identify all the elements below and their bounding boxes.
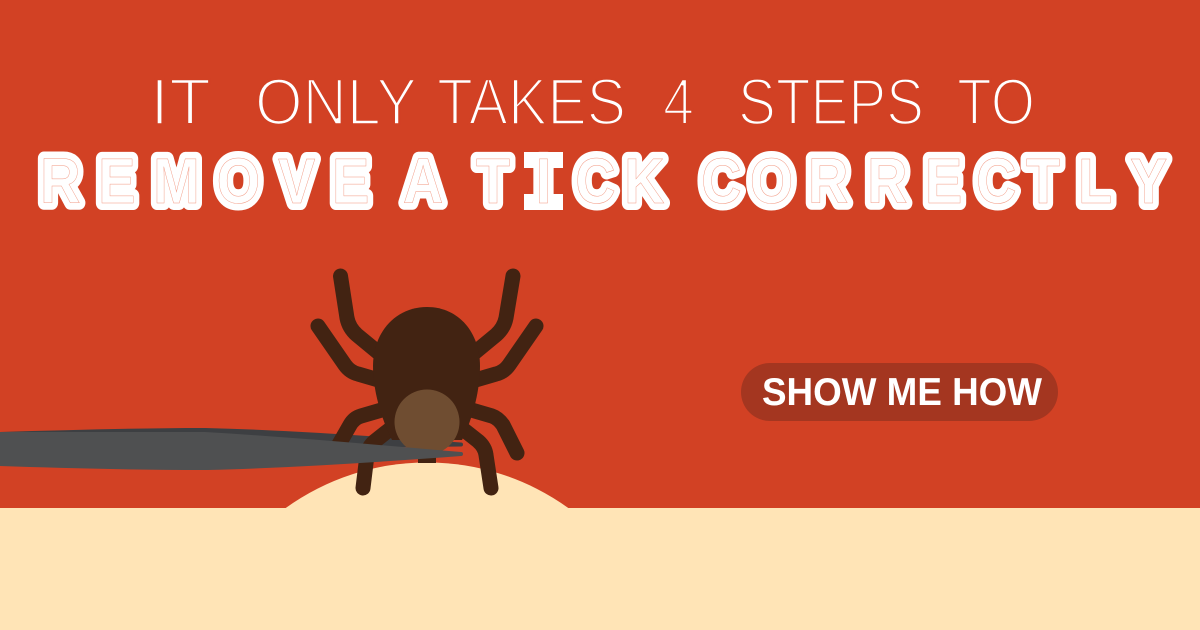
heading: it only takes 4 steps to: 4: [663, 64, 694, 138]
tick head: [394, 390, 460, 454]
icon: tick: [318, 276, 536, 488]
heading: it only takes 4 steps to: TAKES: [437, 64, 626, 138]
heading: it only takes 4 steps to: ONLY: [255, 64, 417, 138]
heading: it only takes 4 steps to: TO: [957, 64, 1035, 138]
tick body: [373, 307, 480, 440]
tick mouthpart: [418, 448, 436, 463]
icon: tweezers front arm: [0, 432, 463, 470]
button: show me how: SHOW ME HOW: [762, 371, 1042, 414]
heading: it only takes 4 steps to: STEPS: [738, 64, 924, 138]
heading: it only takes 4 steps to: [150, 64, 1035, 138]
tick legs: [318, 276, 536, 488]
skin with bump: [0, 462, 1200, 630]
icon: tweezers back arm: [0, 428, 463, 452]
heading: it only takes 4 steps to: IT: [150, 64, 211, 138]
button: show me how: [741, 363, 1058, 421]
heading: remove a tick correctly: REMOVE A TICK CORRECTLY: [40, 145, 1167, 217]
heading: remove a tick correctly: REMOVE A TICK CORRECTLY: [40, 145, 1167, 217]
